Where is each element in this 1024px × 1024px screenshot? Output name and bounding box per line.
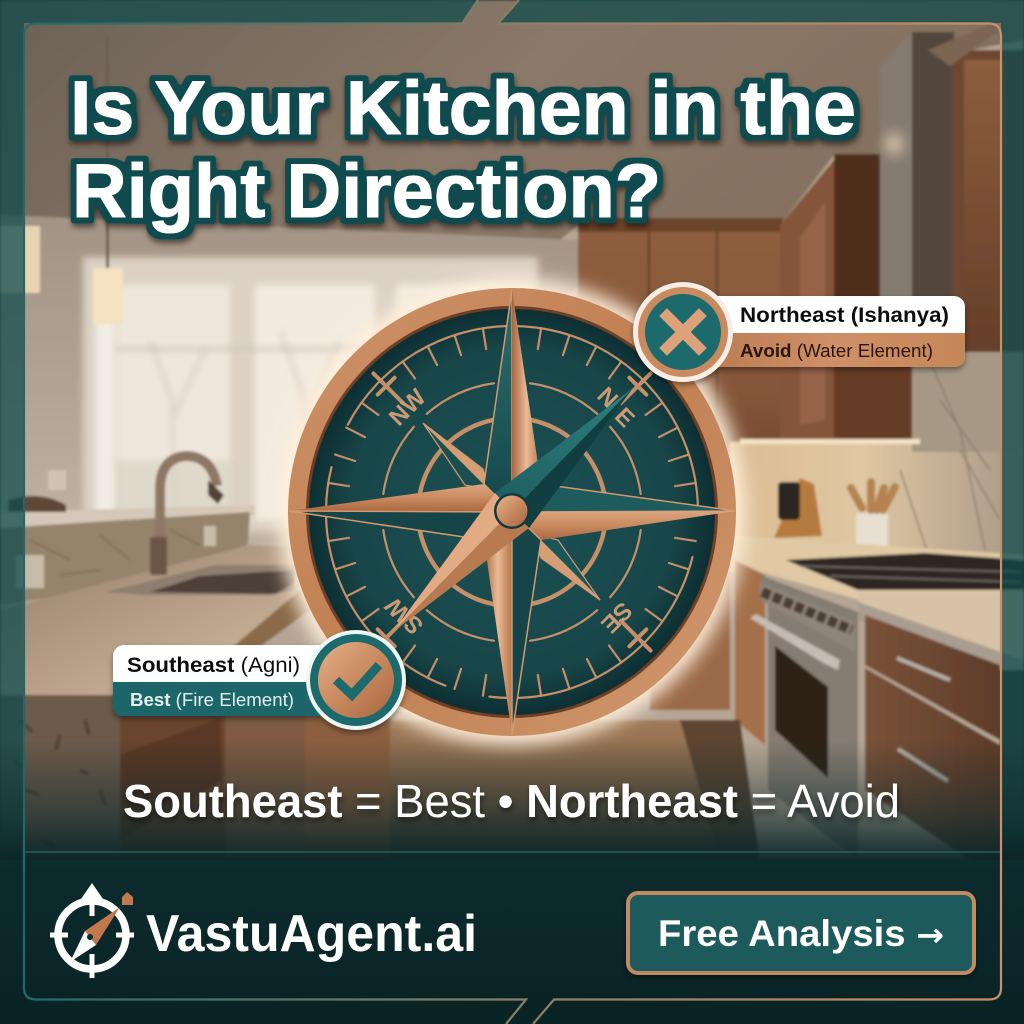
- compass rim: [288, 288, 736, 736]
- title: Right Direction?: [72, 149, 661, 234]
- compass needle pointing northeast: [393, 388, 633, 632]
- pendant lamps: [106, 36, 109, 271]
- degree ring and ticks: [326, 326, 698, 698]
- utensil holder: [856, 513, 888, 552]
- callout: southeast best: [113, 630, 406, 730]
- range hood: [880, 32, 912, 350]
- direction labels: S: [398, 609, 429, 640]
- faucet: [160, 456, 217, 545]
- oven front: [760, 575, 858, 860]
- secondary star points: [423, 423, 600, 600]
- far-right tall cabinet: [952, 50, 1024, 420]
- knife block: [774, 478, 822, 538]
- callout: southeast best: Southeast (Agni): [127, 654, 300, 677]
- half wall + ledge: [0, 505, 255, 530]
- icon: check badge: [306, 630, 406, 730]
- callout: northeast avoid: [633, 282, 965, 382]
- compass hub: [494, 493, 530, 529]
- button: free analysis: [628, 893, 974, 973]
- upper cabinets back wall: [578, 225, 783, 495]
- callout: northeast avoid: Avoid (Water Element): [740, 341, 933, 361]
- chair: [8, 496, 66, 512]
- right counter: [858, 592, 1024, 675]
- northeast label: [700, 296, 965, 367]
- compass glow: [278, 278, 746, 746]
- window: [83, 257, 538, 532]
- direction labels: E: [609, 402, 640, 433]
- direction labels: W: [380, 592, 415, 627]
- southeast label: [113, 645, 353, 716]
- cooktop: [786, 553, 1024, 590]
- ceiling: [0, 0, 1024, 240]
- direction labels: [380, 382, 640, 640]
- direction labels: N: [592, 382, 623, 413]
- island base: [0, 695, 122, 895]
- callout: southeast best: Best (Fire Element): [130, 690, 294, 710]
- bottom dark gradient: [0, 740, 1024, 865]
- title: [70, 66, 856, 234]
- backsplash: [730, 442, 1024, 572]
- floor: [390, 720, 735, 860]
- icon: compass logo: [50, 883, 134, 978]
- left side cabinet: [735, 560, 765, 745]
- sink: [105, 565, 295, 595]
- right drawers: [865, 615, 1000, 740]
- direction labels: SE: [595, 596, 637, 638]
- button: free analysis: Free Analysis →: [658, 913, 944, 954]
- icon: cross badge: [633, 282, 733, 382]
- tagline: Southeast = Best • Northeast = Avoid: [123, 775, 900, 827]
- callout: northeast avoid: Northeast (Ishanya): [740, 304, 949, 327]
- title: Is Your Kitchen in the: [70, 66, 856, 151]
- main star: [289, 289, 736, 735]
- footer band: [0, 860, 1024, 1024]
- island counter: [0, 545, 310, 695]
- back wall: [0, 215, 580, 560]
- logo: [50, 883, 477, 978]
- back counter: [735, 535, 1024, 600]
- lower cabinets: [120, 700, 390, 870]
- compass dial: [309, 309, 715, 715]
- brand name: VastuAgent.ai: [146, 905, 477, 963]
- compass: [288, 288, 736, 736]
- direction labels: NW: [384, 384, 432, 431]
- side upper cabinet: [780, 160, 834, 445]
